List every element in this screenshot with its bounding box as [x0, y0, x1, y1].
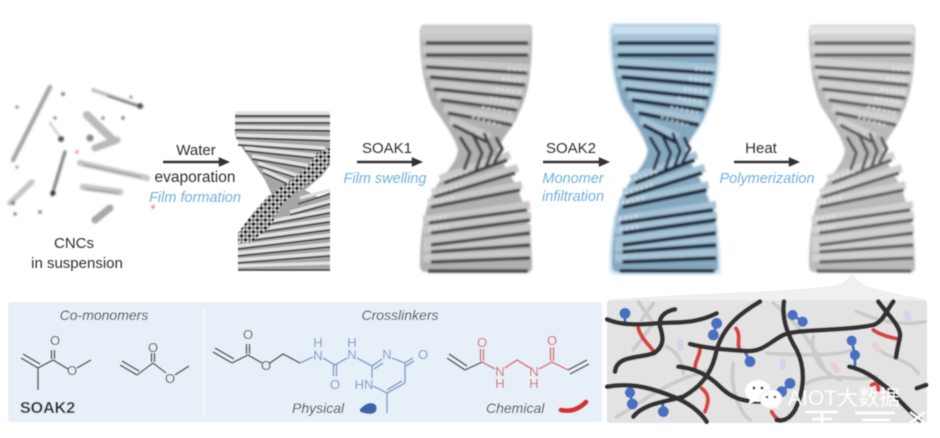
rod particles	[10, 87, 147, 220]
polymerized helix	[809, 25, 915, 272]
faded crosslinks	[680, 313, 908, 370]
molecule: physical crosslinker: H	[313, 335, 323, 350]
step 1: water evaporation: Water	[176, 142, 216, 159]
panel: monomers	[8, 302, 602, 422]
step 2: SOAK1: SOAK1	[362, 140, 412, 157]
ion dots	[13, 92, 155, 216]
step 3: SOAK2: Monomer	[542, 171, 605, 187]
molecule: physical crosslinker: O	[261, 358, 271, 373]
molecule: physical crosslinker: O	[243, 327, 253, 342]
step 3: SOAK2	[542, 140, 607, 205]
step 1: water evaporation: evaporation	[154, 169, 236, 186]
watermark: AIOT大数据	[788, 387, 900, 410]
molecule: physical crosslinker: O	[330, 377, 340, 392]
step 2: SOAK1	[344, 140, 426, 187]
step 3: SOAK2: infiltration	[542, 189, 604, 205]
molecule: methyl methacrylate: O	[67, 363, 77, 378]
arrow	[543, 159, 607, 165]
checker rod ends	[238, 148, 330, 243]
label: CNCs in suspension: in suspension	[31, 255, 123, 272]
CNC rods in suspension	[10, 87, 155, 220]
molecule: chemical crosslinker: H	[529, 376, 539, 391]
black polymer backbones	[607, 302, 926, 422]
dry film helix	[235, 113, 330, 270]
molecule: chemical crosslinker: O	[547, 333, 557, 348]
label: CNCs in suspension	[31, 235, 123, 272]
molecule: physical crosslinker: N	[382, 347, 392, 362]
molecule: chemical crosslinker	[447, 333, 589, 391]
arrow	[163, 159, 227, 165]
label: SOAK2: SOAK2	[20, 400, 75, 417]
label: chemical	[486, 400, 586, 416]
watermark	[745, 380, 925, 423]
heading: crosslinkers: Crosslinkers	[361, 307, 439, 323]
label: physical	[292, 400, 377, 416]
heading: co-monomers: Co-monomers	[60, 307, 148, 323]
label: physical: Physical	[292, 400, 345, 416]
molecule: physical crosslinker: HN	[355, 377, 373, 392]
step 1: water evaporation	[149, 142, 241, 206]
molecule: methyl methacrylate: O	[50, 333, 60, 348]
molecule: methyl acrylate	[120, 340, 189, 386]
step 3: SOAK2: SOAK2	[546, 140, 596, 157]
molecule: chemical crosslinker: H	[495, 376, 505, 391]
molecule: physical crosslinker	[213, 327, 428, 413]
label: chemical: Chemical	[486, 400, 545, 416]
molecule: physical crosslinker: H	[347, 335, 357, 350]
monomer infiltrated helix, blue	[609, 23, 721, 275]
step 4: heat	[719, 140, 815, 187]
molecule: physical crosslinker: N	[347, 347, 357, 362]
molecule: physical crosslinker: O	[418, 347, 428, 362]
icon: blue blob	[360, 403, 377, 414]
blue physical crosslinks	[621, 309, 859, 416]
zoom connector	[607, 273, 927, 300]
molecule: physical crosslinker: N	[313, 348, 323, 363]
background polymer chains	[617, 302, 925, 420]
molecule: chemical crosslinker: O	[477, 335, 487, 350]
arrow	[357, 159, 420, 165]
step 2: SOAK1: Film swelling	[344, 171, 426, 187]
label: CNCs in suspension: CNCs	[54, 235, 94, 252]
molecule: chemical crosslinker: N	[529, 364, 539, 379]
step 4: heat: Polymerization	[719, 171, 815, 187]
red chemical crosslinks	[638, 328, 900, 420]
panel: polymer network	[607, 300, 927, 423]
molecule: chemical crosslinker: N	[495, 364, 505, 379]
step 4: heat: Heat	[745, 140, 778, 157]
molecule: methyl methacrylate	[21, 333, 91, 390]
arrow	[734, 159, 797, 165]
molecule: methyl acrylate: O	[165, 371, 175, 386]
swollen film helix	[420, 25, 532, 272]
icon: chat bubbles	[745, 380, 782, 410]
molecule: methyl acrylate: O	[148, 340, 158, 355]
dark rod ends and blobs	[11, 103, 143, 205]
icon: red link	[561, 402, 586, 411]
step 1: water evaporation: Film formation	[149, 190, 241, 206]
